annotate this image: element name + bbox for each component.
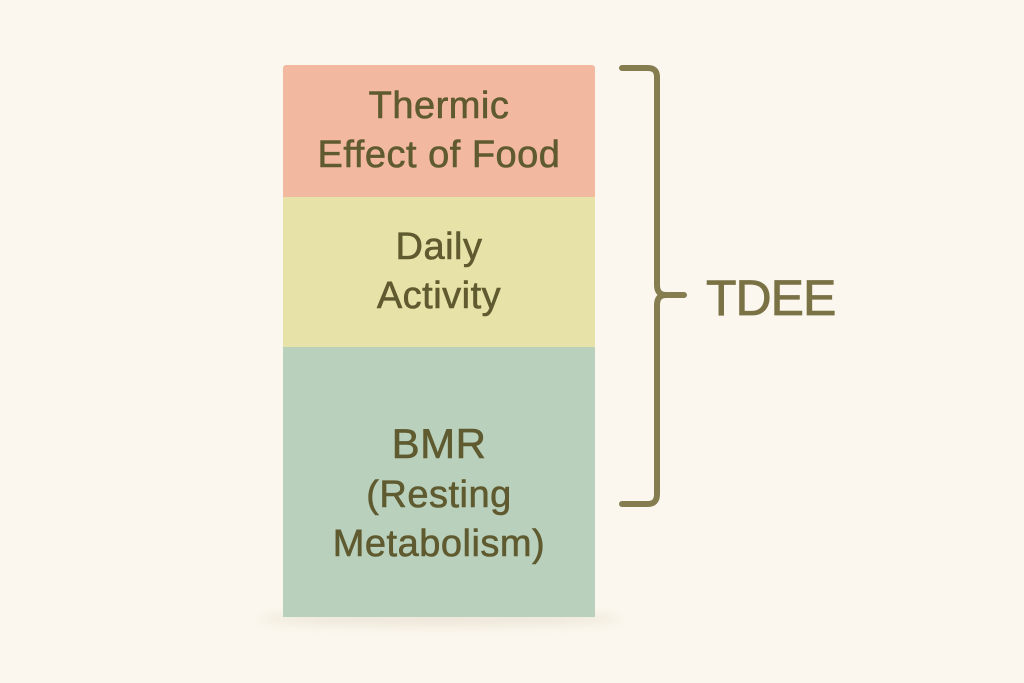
segment: BMR: BMR [392, 420, 486, 467]
segment: daily activity: Daily [396, 226, 482, 268]
segment: daily activity: Activity [377, 275, 501, 317]
segment: daily activity [283, 197, 595, 347]
segment: BMR [283, 347, 595, 617]
segment: thermic effect of food: Thermic [369, 85, 509, 127]
segment: thermic effect of food [283, 65, 595, 197]
segment: BMR: (Resting [366, 474, 512, 516]
segment: BMR: Metabolism) [333, 523, 545, 565]
shadow under stack [260, 612, 620, 626]
segment: thermic effect of food: Effect of Food [318, 134, 560, 176]
label: TDEE: TDEE [706, 270, 835, 326]
stacked bar [283, 65, 595, 617]
